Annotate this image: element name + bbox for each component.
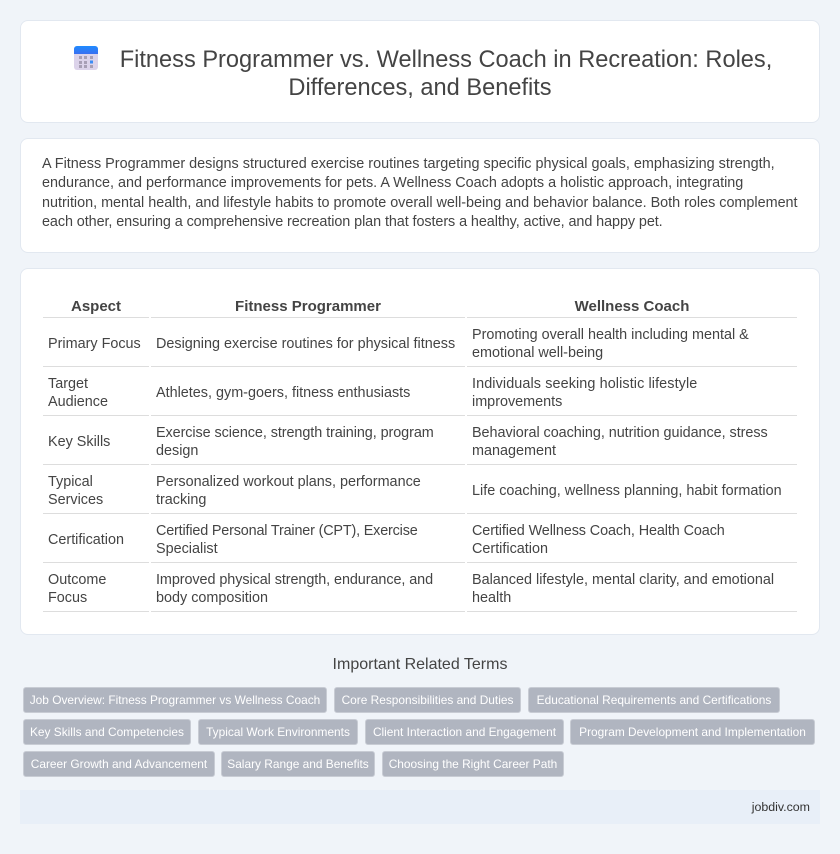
title (120, 47, 772, 101)
row: primary focus: Designing exercise routines for physical fitness (156, 336, 455, 352)
row: typical services: tracking (156, 492, 206, 508)
related term tags: Career Growth and Advancement (31, 757, 207, 771)
row: primary focus: emotional well-being (472, 345, 603, 361)
related term tags: Job Overview: Fitness Programmer vs Wellness Coach (30, 693, 320, 707)
panel: comparison table (20, 268, 820, 635)
panel: intro (20, 138, 820, 253)
table header (71, 298, 689, 315)
row: key skills: Key Skills (48, 434, 110, 450)
row: outcome focus: Improved physical strength, endurance, and (156, 572, 433, 588)
related term tags: Core Responsibilities and Duties (342, 693, 513, 707)
related term tags: Program Development and Implementation (579, 725, 806, 739)
row: certification: Certification (472, 541, 548, 557)
panel: header (20, 20, 820, 123)
table header: Aspect (71, 298, 121, 315)
row: target audience: Athletes, gym-goers, fitness enthusiasts (156, 385, 410, 401)
row: certification: Certified Personal Trainer (CPT), Exercise (156, 523, 418, 539)
table header: Fitness Programmer (235, 298, 381, 315)
related term tags: Choosing the Right Career Path (389, 757, 557, 771)
footer text: jobdiv.com (752, 800, 810, 814)
row: outcome focus: health (472, 590, 511, 606)
row: target audience: improvements (472, 394, 562, 410)
row: certification: Certified Wellness Coach, Health Coach (472, 523, 725, 539)
row: outcome focus: Outcome (48, 572, 106, 588)
row: primary focus: Primary Focus (48, 336, 141, 352)
row: typical services: Life coaching, wellness planning, habit formation (472, 483, 782, 499)
row: key skills: management (472, 443, 556, 459)
related term tags (23, 687, 815, 777)
intro text: each other, ensuring a comprehensive recreation plan that fosters a healthy, active, and happy pet. (42, 214, 663, 230)
row: certification (48, 523, 725, 557)
footer bar (20, 790, 820, 824)
intro text (42, 156, 798, 230)
row: key skills (48, 425, 768, 459)
related term tags: Salary Range and Benefits (227, 757, 369, 771)
row: target audience: Individuals seeking holistic lifestyle (472, 376, 697, 392)
icon: calendar (74, 46, 98, 70)
row: typical services: Services (48, 492, 103, 508)
row: primary focus (48, 327, 749, 361)
related term tags: Key Skills and Competencies (30, 725, 184, 739)
row: outcome focus (48, 572, 774, 606)
table header: Wellness Coach (575, 298, 689, 315)
intro text: nutrition, mental health, and lifestyle habits to promote overall well-being and behavior balance. Both roles complement (42, 195, 798, 211)
row: outcome focus: body composition (156, 590, 268, 606)
title: Differences, and Benefits (288, 75, 552, 101)
row: typical services (48, 474, 782, 508)
row: primary focus: Promoting overall health including mental & (472, 327, 749, 343)
row: key skills: Exercise science, strength training, program (156, 425, 434, 441)
row: outcome focus: Focus (48, 590, 87, 606)
title: Fitness Programmer vs. Wellness Coach in Recreation: Roles, (120, 47, 772, 73)
row: target audience (48, 376, 697, 410)
related term tags: Educational Requirements and Certifications (537, 693, 771, 707)
row: key skills: Behavioral coaching, nutrition guidance, stress (472, 425, 768, 441)
row: outcome focus: Balanced lifestyle, mental clarity, and emotional (472, 572, 774, 588)
related term tags: Client Interaction and Engagement (373, 725, 556, 739)
heading: related terms: Important Related Terms (333, 656, 507, 673)
row: target audience: Target (48, 376, 88, 392)
row: certification: Certification (48, 532, 124, 548)
row: typical services: Typical (48, 474, 93, 490)
row: key skills: design (156, 443, 198, 459)
intro text: endurance, and performance improvements for pets. A Wellness Coach adopts a holistic approach, integrating (42, 175, 743, 191)
row: certification: Specialist (156, 541, 218, 557)
related term tags: Typical Work Environments (206, 725, 350, 739)
row: typical services: Personalized workout plans, performance (156, 474, 421, 490)
intro text: A Fitness Programmer designs structured exercise routines targeting specific physical goals, emphasizing strength, (42, 156, 775, 172)
row: target audience: Audience (48, 394, 108, 410)
table (43, 298, 797, 612)
